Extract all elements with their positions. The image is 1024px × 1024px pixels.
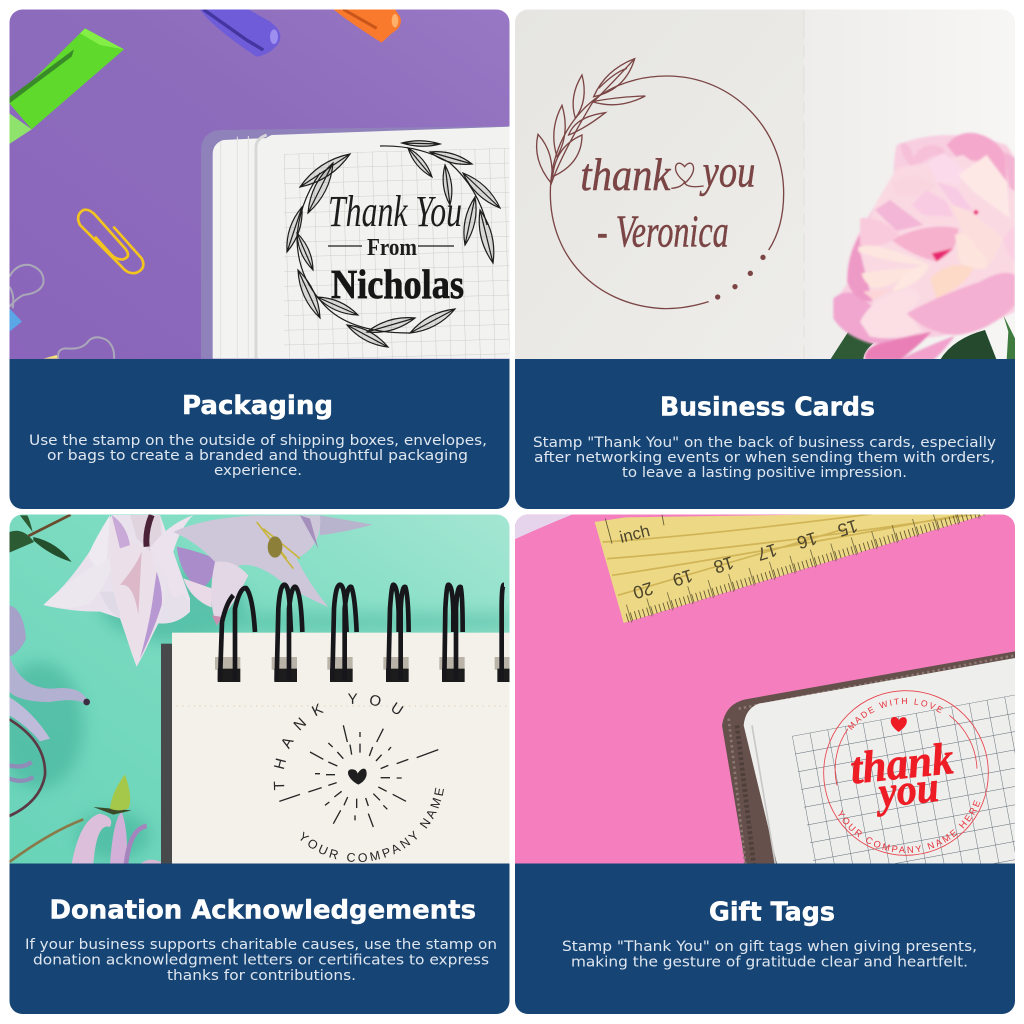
icon: left lilac flower bbox=[43, 515, 218, 667]
shadows bbox=[0, 569, 510, 859]
ruler labels: 18 bbox=[711, 552, 736, 577]
stamp: wreath with Thank You From Nicholas bbox=[287, 141, 500, 347]
description: or bags to create a branded and thoughtful packaging bbox=[47, 448, 468, 464]
branch bbox=[537, 59, 645, 183]
arc text: your company name here: YOUR COMPANY NAME HERE bbox=[838, 800, 980, 854]
caption block bbox=[9, 864, 510, 1014]
icon: yellow paperclip bbox=[78, 210, 143, 273]
dots bbox=[715, 255, 766, 300]
icon: right lilac flower bbox=[173, 515, 373, 625]
ruler labels: inch bbox=[618, 521, 652, 547]
photo: card with peony bbox=[515, 9, 1016, 360]
stamp text: Nicholas: Nicholas bbox=[331, 261, 464, 307]
wreath leaves bbox=[287, 141, 500, 347]
notebook bbox=[201, 126, 510, 359]
heading: Packaging bbox=[182, 391, 333, 421]
description: to leave a lasting positive impression. bbox=[622, 465, 907, 481]
panel: business cards bbox=[515, 9, 1016, 510]
description: donation acknowledgment letters or certificates to express bbox=[33, 953, 489, 969]
stamp text: Veronica: - Veronica bbox=[597, 207, 729, 257]
description: thanks for contributions. bbox=[167, 968, 356, 984]
description bbox=[533, 435, 996, 481]
icon: red heart bbox=[891, 717, 907, 732]
photo: teal desk with spiral notebook bbox=[10, 514, 510, 864]
description bbox=[562, 939, 977, 971]
stamp text: From: From bbox=[367, 235, 417, 261]
spiral rings bbox=[215, 585, 511, 682]
outer ring bbox=[824, 691, 988, 855]
ruler bbox=[595, 507, 985, 623]
ruler labels bbox=[618, 516, 860, 603]
ruler labels: 19 bbox=[670, 565, 695, 590]
description bbox=[25, 937, 497, 984]
photo: purple desk with notebook bbox=[9, 9, 510, 360]
icon: binder clips bbox=[9, 265, 114, 359]
description: after networking events or when sending them with orders, bbox=[534, 450, 995, 466]
stamp: circle wreath with thank you Veronica bbox=[537, 59, 784, 309]
icon: top-left leaves bbox=[9, 515, 72, 562]
icon: heart outline bbox=[671, 163, 704, 188]
icon: peony flower bbox=[830, 133, 1015, 360]
description: making the gesture of gratitude clear and heartfelt. bbox=[571, 955, 968, 971]
corner decoration bbox=[515, 515, 572, 539]
icon: heart bbox=[348, 769, 367, 785]
photo: pink desk with ruler and notebook bbox=[515, 514, 1015, 864]
description: experience. bbox=[214, 463, 302, 479]
caption block bbox=[515, 864, 1016, 1014]
photo objects bbox=[537, 59, 784, 309]
photo objects bbox=[9, 9, 510, 359]
stamp: sunburst rays and heart bbox=[279, 725, 438, 827]
ruler labels: 15 bbox=[835, 516, 860, 541]
icon: left-edge flower bbox=[9, 605, 90, 816]
icon: bud and stem bbox=[9, 774, 165, 864]
icon: purple pen cap bbox=[200, 9, 280, 57]
description bbox=[29, 433, 487, 479]
ruler labels: 16 bbox=[795, 528, 820, 553]
description: Stamp "Thank You" on the back of business cards, especially bbox=[533, 435, 996, 451]
wreath stems bbox=[297, 146, 487, 333]
description: Stamp "Thank You" on gift tags when giving presents, bbox=[562, 939, 977, 955]
stamp text: THANK YOU arc: THANK YOU bbox=[274, 694, 404, 790]
heading: Donation Acknowledgements bbox=[50, 896, 476, 926]
ruler labels: 20 bbox=[631, 578, 656, 603]
panel: donation acknowledgements bbox=[10, 514, 510, 1014]
heading: Business Cards bbox=[660, 393, 875, 423]
stamp text: you: you bbox=[699, 146, 755, 197]
icon: green highlighter bbox=[9, 28, 124, 144]
circle bbox=[550, 76, 784, 309]
stamp text: you: you bbox=[872, 763, 941, 817]
stamp text: thank: thank bbox=[848, 733, 956, 794]
stamp text: YOUR COMPANY NAME arc: YOUR COMPANY NAME bbox=[300, 788, 444, 862]
description: Use the stamp on the outside of shipping boxes, envelopes, bbox=[29, 433, 487, 449]
panel: gift tags bbox=[515, 514, 1015, 1014]
notebook bbox=[722, 651, 1015, 864]
heading: Gift Tags bbox=[709, 898, 835, 928]
notebook bbox=[161, 633, 512, 864]
ruler labels: 17 bbox=[755, 540, 780, 565]
caption block bbox=[515, 359, 1016, 510]
inner ring arcs bbox=[835, 715, 977, 785]
panel: packaging bbox=[9, 9, 510, 510]
arc text: made with love: MADE WITH LOVE bbox=[848, 698, 943, 730]
stamp text: Thank You: Thank You bbox=[328, 187, 462, 236]
caption block bbox=[9, 359, 510, 510]
stamp: red circle with thank you bbox=[823, 690, 989, 856]
stamp text: thank: thank bbox=[580, 149, 672, 200]
photo objects bbox=[515, 514, 1015, 864]
photo objects bbox=[0, 515, 512, 864]
description: If your business supports charitable causes, use the stamp on bbox=[25, 937, 497, 953]
icon: orange pen cap bbox=[333, 9, 401, 43]
